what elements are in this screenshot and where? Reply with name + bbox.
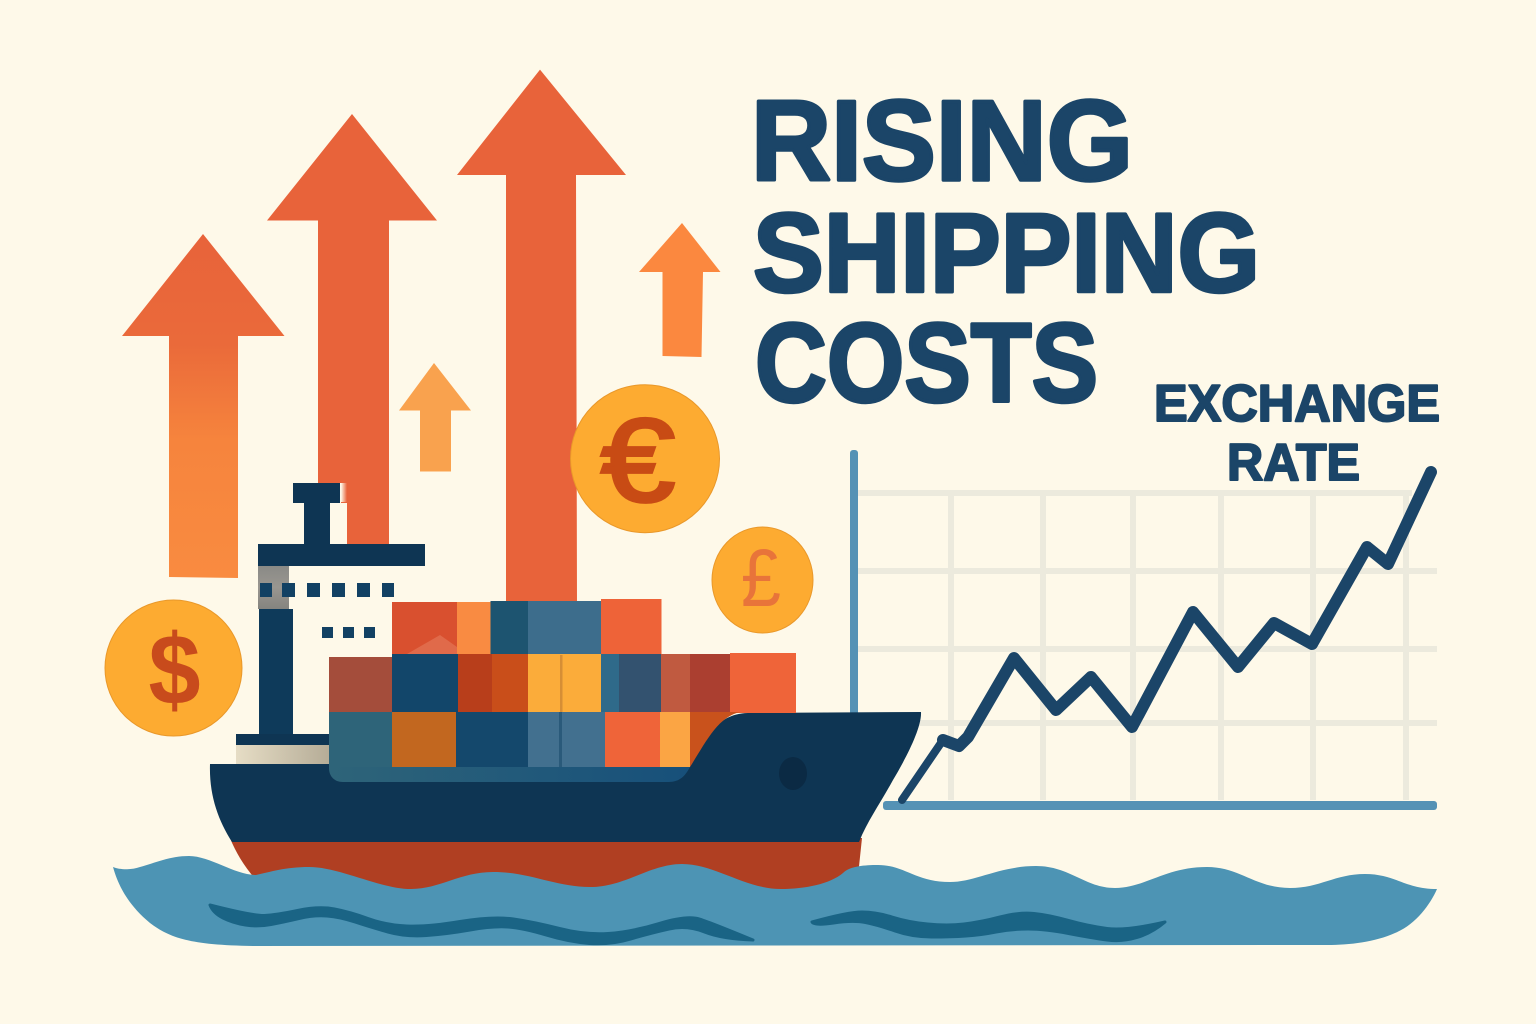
hull: [210, 712, 921, 842]
chart heading: exchange rate: RATE: [1227, 434, 1360, 492]
x axis: [883, 801, 1437, 810]
funnel: [293, 483, 340, 545]
arrows group: [122, 70, 720, 604]
title: RISING: [751, 78, 1133, 205]
arrow: small lower: [399, 363, 471, 472]
arrow: middle large: [267, 114, 437, 550]
container base panel: [329, 712, 690, 782]
rising rate line: [902, 472, 1431, 800]
title: SHIPPING: [753, 190, 1260, 316]
coin: pound: £: [741, 533, 781, 624]
bottom row: [329, 712, 741, 767]
wave left: [210, 905, 753, 944]
arrow: tallest: [457, 70, 626, 604]
containers: [329, 599, 796, 767]
tower column: [259, 609, 293, 736]
middle row: [329, 653, 796, 713]
bridge grey block: [258, 566, 289, 609]
chart heading: exchange rate: [1154, 375, 1440, 492]
porthole: [779, 757, 807, 790]
title: [751, 78, 1260, 426]
arrow: small upper: [639, 223, 720, 357]
wave right: [812, 912, 1165, 941]
y axis: [850, 450, 858, 720]
funnel backdrop: [318, 483, 347, 545]
deck: [236, 734, 330, 745]
lower windows: [322, 627, 375, 638]
hull red band: [230, 838, 862, 895]
deck base: [236, 745, 330, 764]
exchange rate chart: [850, 450, 1437, 810]
chart heading: exchange rate: EXCHANGE: [1154, 375, 1440, 433]
coin: dollar: [105, 600, 242, 736]
arrow: left large: [122, 234, 284, 578]
chart grid: [858, 493, 1437, 800]
coin: euro: €: [601, 395, 675, 527]
sea body: [113, 856, 1437, 946]
coin: euro: [570, 385, 720, 533]
title: COSTS: [755, 300, 1098, 426]
bridge roof: [258, 544, 425, 566]
water: [113, 856, 1437, 946]
coin: pound: [712, 527, 813, 633]
upper windows: [260, 583, 394, 597]
ship: [210, 483, 921, 895]
top row: [392, 599, 662, 654]
coin: dollar: $: [148, 614, 200, 726]
